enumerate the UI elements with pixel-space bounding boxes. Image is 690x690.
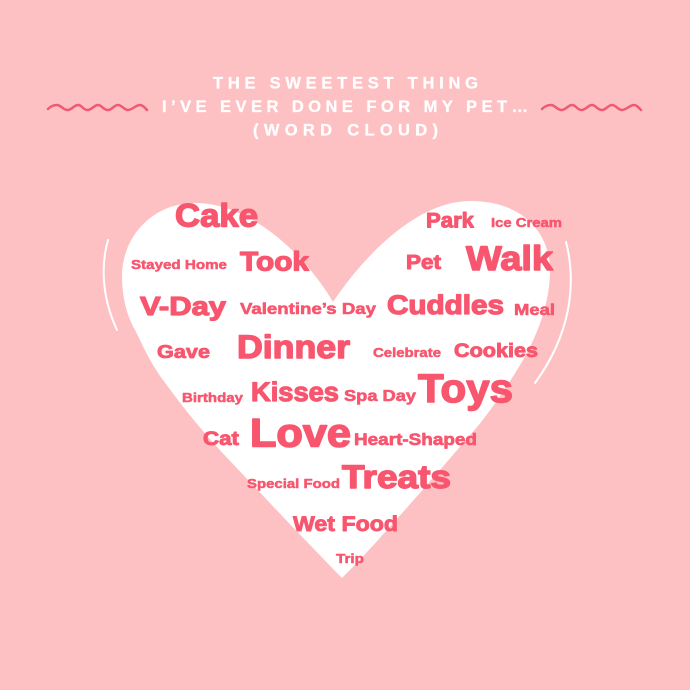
word cloud: Toys bbox=[418, 367, 513, 411]
word cloud bbox=[131, 198, 562, 566]
squiggle: right bbox=[542, 105, 641, 110]
word cloud: Trip bbox=[336, 551, 364, 566]
word cloud: V-Day bbox=[140, 291, 227, 321]
word cloud: Gave bbox=[157, 342, 210, 362]
word cloud: Wet Food bbox=[293, 513, 398, 536]
word cloud: Kisses bbox=[251, 377, 339, 407]
word cloud: Stayed Home bbox=[131, 257, 227, 272]
word cloud: Heart-Shaped bbox=[354, 430, 477, 449]
squiggle: left bbox=[48, 105, 147, 110]
word cloud: Cake bbox=[175, 198, 258, 234]
title: I’VE EVER DONE FOR MY PET… bbox=[162, 98, 528, 116]
word cloud: Took bbox=[240, 246, 310, 276]
word cloud: Ice Cream bbox=[491, 215, 562, 230]
word cloud: Cat bbox=[203, 428, 240, 450]
title: (WORD CLOUD) bbox=[253, 122, 438, 140]
word cloud: Valentine’s Day bbox=[240, 301, 376, 318]
word cloud: Meal bbox=[514, 302, 555, 319]
word cloud: Special Food bbox=[247, 476, 340, 491]
word cloud: Park bbox=[426, 210, 474, 232]
title bbox=[162, 74, 528, 140]
word cloud: Birthday bbox=[182, 390, 244, 405]
heart bbox=[122, 201, 550, 578]
accent arc: left bbox=[104, 240, 117, 330]
word cloud: Cuddles bbox=[387, 290, 504, 320]
word cloud: Celebrate bbox=[373, 345, 441, 360]
word cloud: Cookies bbox=[454, 341, 538, 362]
accent arc: right bbox=[535, 242, 571, 383]
word cloud: Love bbox=[250, 412, 351, 456]
word cloud: Pet bbox=[406, 252, 441, 274]
word cloud: Treats bbox=[342, 459, 451, 495]
title: THE SWEETEST THING bbox=[213, 74, 478, 92]
word cloud: Dinner bbox=[237, 329, 350, 365]
word cloud: Walk bbox=[466, 240, 553, 278]
word cloud: Spa Day bbox=[344, 388, 416, 405]
